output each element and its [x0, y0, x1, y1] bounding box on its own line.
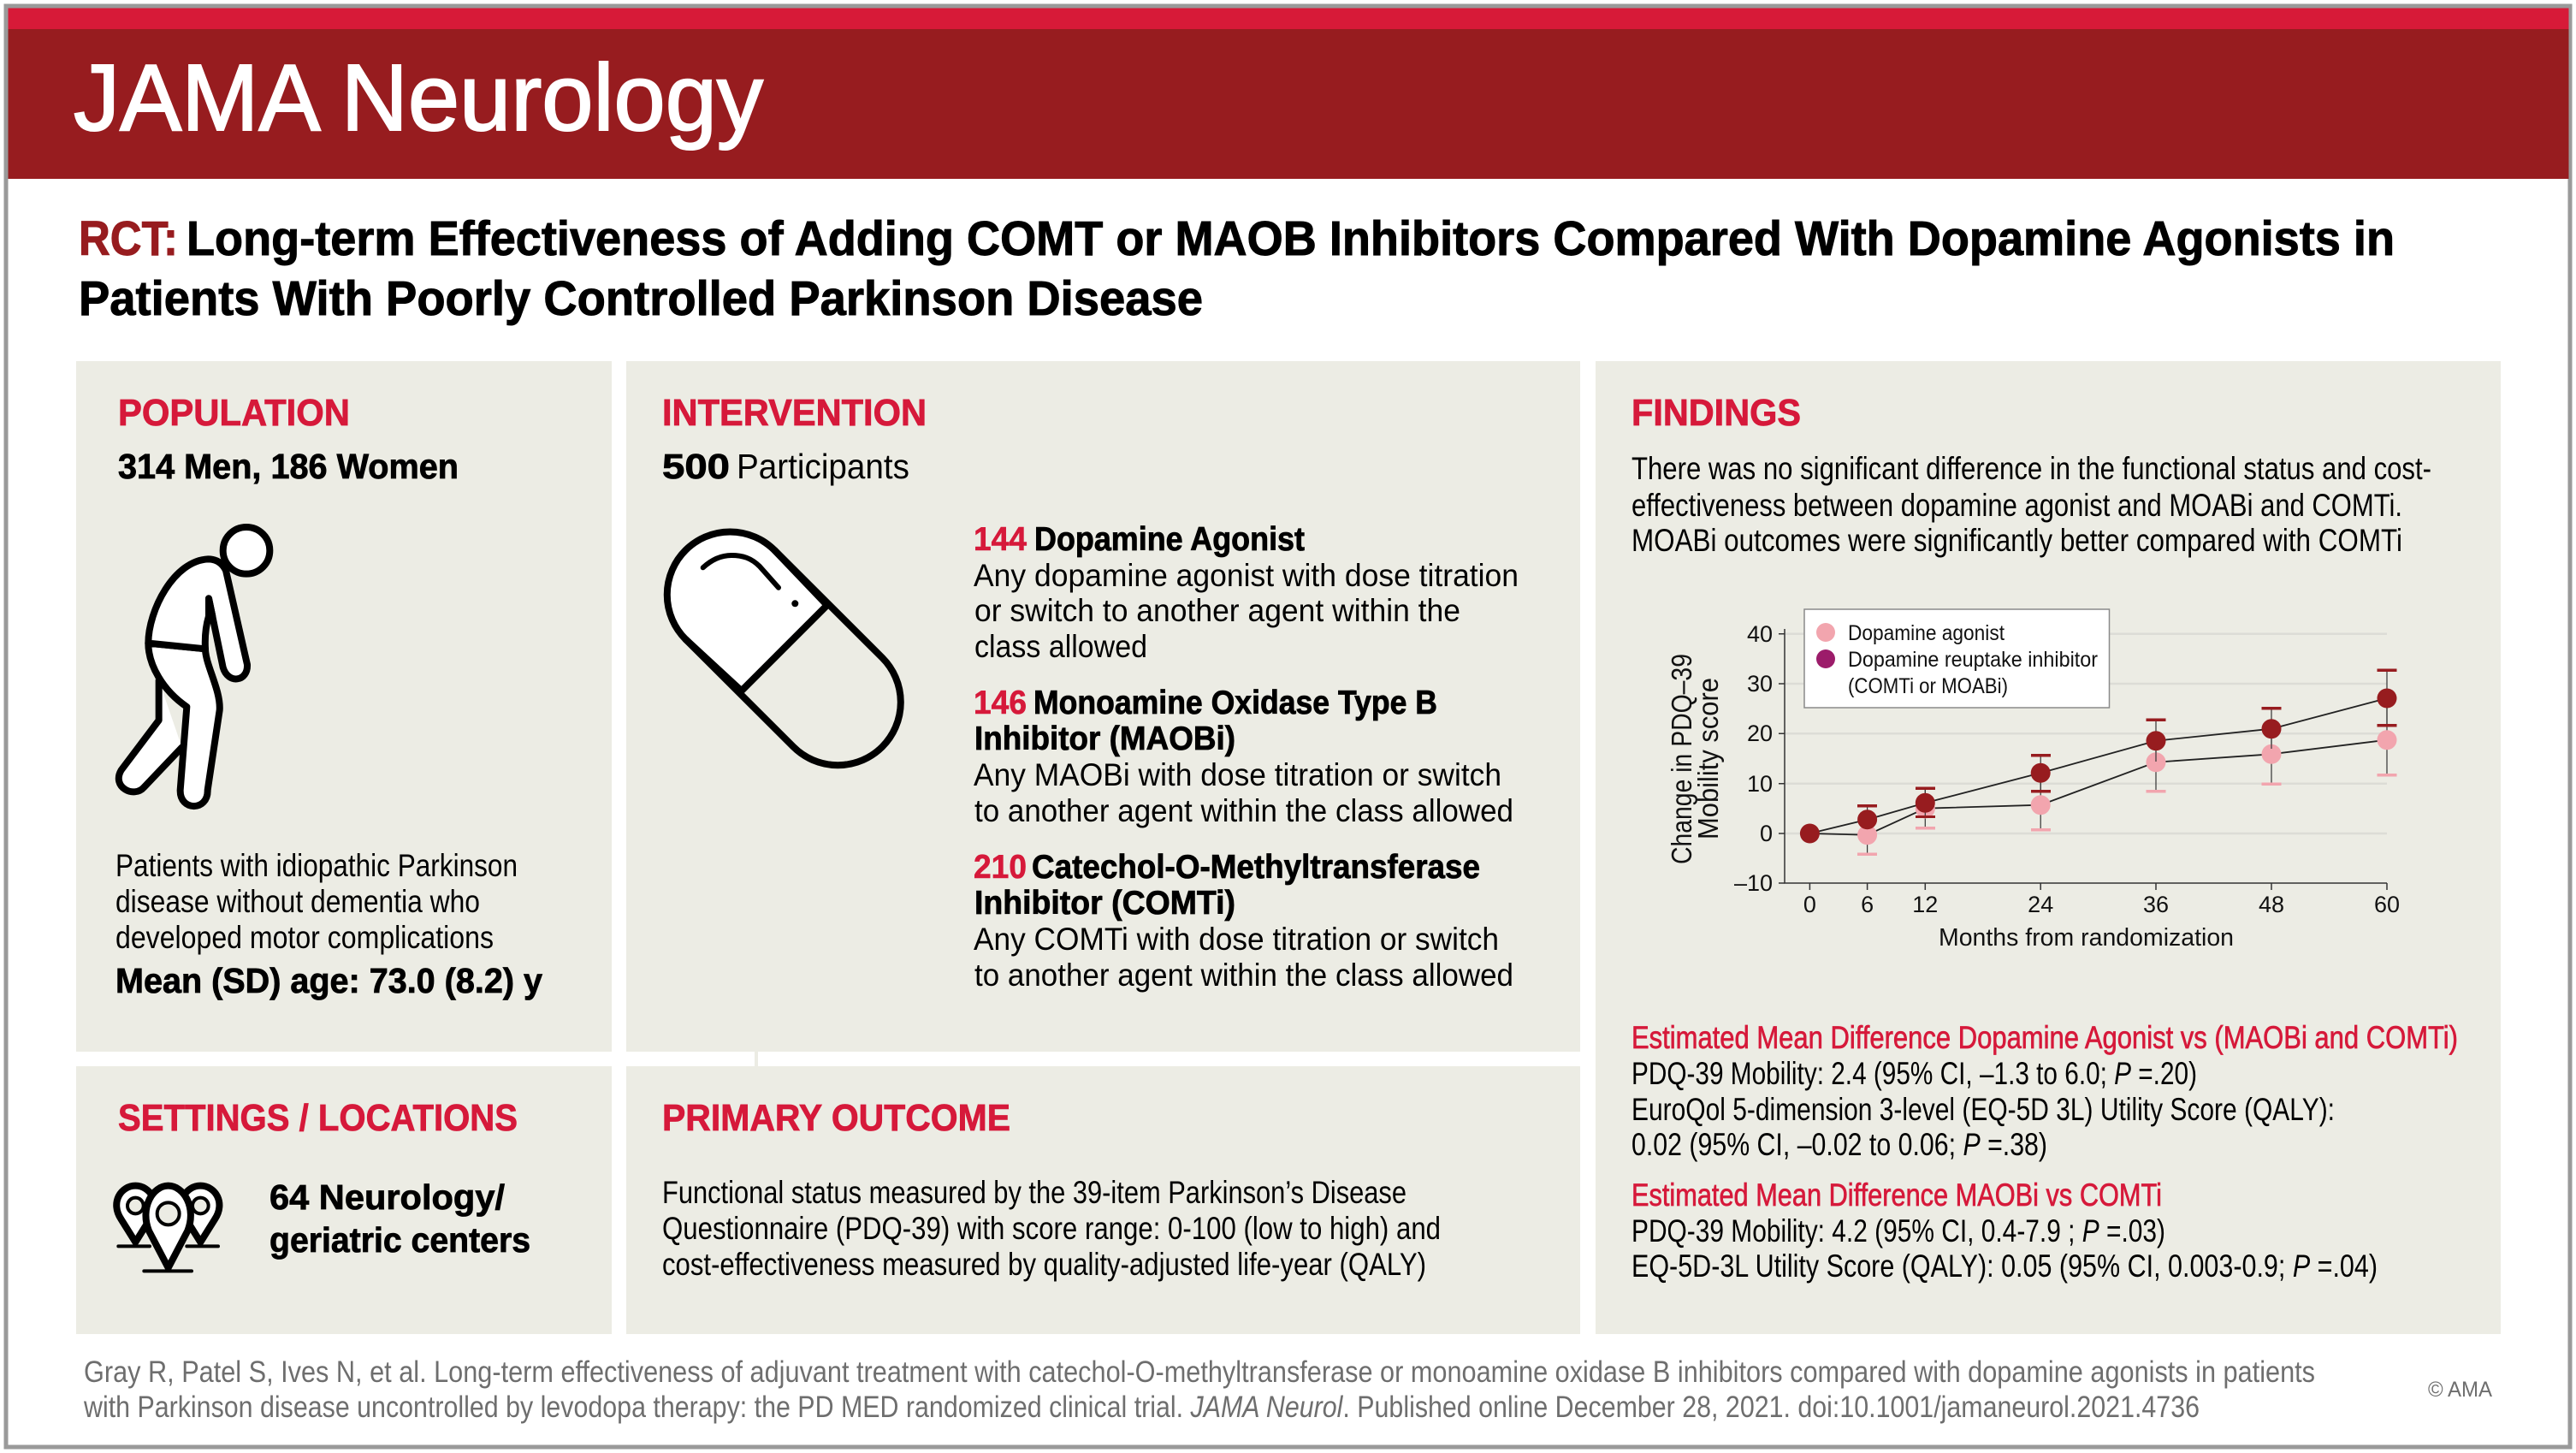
chart legend: (COMTi or MOABi) [1848, 674, 2008, 698]
y axis title [1666, 654, 1724, 864]
estimate: dopamine agonist vs MAOBi and COMTi: EuroQol 5-dimension 3-level (EQ-5D 3L) Utility Score (QALY): [1631, 1092, 2335, 1127]
icon: capsule [667, 531, 901, 765]
x axis labels: 6 [1861, 892, 1874, 917]
participants total: 500 [662, 447, 730, 486]
participants by sex: 314 Men, 186 Women [118, 447, 459, 486]
y axis labels: 0 [1760, 821, 1773, 846]
main title: Patients With Poorly Controlled Parkinson Disease [79, 271, 1203, 326]
participants total: Participants [737, 447, 909, 486]
arm: COMTi: 210 [974, 849, 1027, 886]
sites count [269, 1177, 530, 1260]
copyright: © AMA [2428, 1378, 2492, 1402]
y axis labels [1734, 621, 1773, 896]
arm: MAOBi: to another agent within the class allowed [974, 793, 1513, 828]
citation: Gray R, Patel S, Ives N, et al. Long-term effectiveness of adjuvant treatment with catechol-O-methyltransferase or monoamine oxidase B inhibitors compared with dopamine agonists in patients [84, 1355, 2315, 1389]
mean age: Mean (SD) age: 73.0 (8.2) y [115, 961, 542, 1000]
x axis labels: 48 [2259, 892, 2284, 917]
outcome description: Questionnaire (PDQ-39) with score range: 0-100 (low to high) and [662, 1211, 1441, 1246]
estimate: dopamine agonist vs MAOBi and COMTi [1631, 1020, 2458, 1162]
panel: findings [1596, 361, 2501, 1334]
y axis labels: 10 [1747, 771, 1773, 797]
estimate: MAOBi vs COMTi: Estimated Mean Difference MAOBi vs COMTi [1631, 1177, 2162, 1213]
participants total [662, 447, 909, 486]
estimate: dopamine agonist vs MAOBi and COMTi: PDQ-39 Mobility: 2.4 (95% CI, –1.3 to 6.0; P =.20) [1631, 1056, 2197, 1091]
outcome description [662, 1175, 1441, 1282]
y axis labels: –10 [1734, 870, 1773, 896]
arm: MAOBi: Any MAOBi with dose titration or switch [974, 757, 1501, 792]
arm: dopamine agonist: class allowed [974, 629, 1147, 664]
heading: primary outcome: PRIMARY OUTCOME [662, 1097, 1010, 1139]
series: dopamine agonist [1809, 704, 2397, 856]
outcome description: Functional status measured by the 39-item Parkinson’s Disease [662, 1175, 1406, 1210]
y axis labels: 30 [1747, 671, 1773, 697]
panel: intervention [626, 361, 1580, 1066]
citation [83, 1355, 2315, 1424]
arm: MAOBi: Inhibitor (MAOBi) [974, 721, 1235, 757]
estimate: MAOBi vs COMTi: PDQ-39 Mobility: 4.2 (95% CI, 0.4-7.9 ; P =.03) [1631, 1213, 2165, 1248]
main title [79, 211, 2395, 326]
x axis labels: 60 [2374, 892, 2400, 917]
x axis labels: 12 [1912, 892, 1938, 917]
panel: settings and locations [76, 1066, 612, 1334]
arm: MAOBi: Monoamine Oxidase Type B [1033, 685, 1437, 721]
population description [115, 848, 518, 955]
y axis labels: 20 [1747, 721, 1773, 746]
sites count: 64 Neurology/ [269, 1177, 505, 1217]
arm: COMTi: Catechol-O-Methyltransferase [1032, 849, 1480, 886]
chart legend [1804, 609, 2110, 708]
arm: MAOBi: 146 [974, 685, 1027, 721]
chart legend: Dopamine agonist [1848, 621, 2005, 645]
header banner [9, 9, 2568, 179]
findings summary [1631, 451, 2431, 558]
estimate: dopamine agonist vs MAOBi and COMTi: 0.02 (95% CI, –0.02 to 0.06; P =.38) [1631, 1127, 2047, 1162]
citation: with Parkinson disease uncontrolled by levodopa therapy: the PD MED randomized clinical trial. JAMA Neurol. Published online December 28, 2021. doi:10.1001/jamaneurol.2021.4736 [83, 1391, 2200, 1424]
findings summary: MOABi outcomes were significantly better compared with COMTi [1631, 523, 2402, 558]
x axis labels: 24 [2028, 892, 2053, 917]
main title: RCT: [79, 211, 178, 266]
y axis title: Mobility score [1692, 678, 1724, 839]
arm: dopamine agonist: or switch to another agent within the [974, 593, 1460, 628]
sites count: geriatric centers [269, 1220, 530, 1260]
arm: dopamine agonist: Dopamine Agonist [1034, 521, 1305, 558]
arm: COMTi: Any COMTi with dose titration or switch [974, 922, 1499, 957]
arm: dopamine agonist: Any dopamine agonist with dose titration [974, 558, 1519, 593]
population description: Patients with idiopathic Parkinson [115, 848, 518, 883]
heading: population: POPULATION [118, 392, 350, 434]
arm: COMTi: Inhibitor (COMTi) [974, 885, 1235, 922]
estimate: MAOBi vs COMTi: EQ-5D-3L Utility Score (QALY): 0.05 (95% CI, 0.003-0.9; P =.04) [1631, 1248, 2378, 1284]
arm: COMTi: to another agent within the class allowed [974, 958, 1513, 993]
x axis title: Months from randomization [1939, 924, 2234, 952]
arm: dopamine agonist [974, 521, 1519, 664]
series: dopamine reuptake inhibitor [1800, 669, 2397, 844]
x axis labels: 36 [2143, 892, 2169, 917]
y axis title: Change in PDQ–39 [1666, 654, 1697, 864]
icon: map pins [116, 1186, 219, 1271]
population description: disease without dementia who [115, 884, 480, 919]
panel: primary outcome [626, 1066, 1580, 1334]
icon: stooped person [119, 527, 269, 806]
arm: COMTi [974, 849, 1513, 993]
x axis labels: 0 [1803, 892, 1816, 917]
heading: intervention: INTERVENTION [662, 392, 927, 434]
panel: population [76, 361, 612, 1052]
x axis labels [1803, 892, 2400, 917]
estimate: MAOBi vs COMTi [1631, 1177, 2378, 1284]
findings summary: There was no significant difference in the functional status and cost- [1631, 451, 2431, 486]
arm: MAOBi [974, 685, 1513, 828]
journal title: JAMA Neurology [74, 45, 763, 151]
main title: Long-term Effectiveness of Adding COMT or MAOB Inhibitors Compared With Dopamine Agonists in [187, 211, 2395, 266]
arm: dopamine agonist: 144 [974, 521, 1027, 558]
heading: findings: FINDINGS [1631, 392, 1801, 434]
outcome description: cost-effectiveness measured by quality-adjusted life-year (QALY) [662, 1247, 1426, 1282]
chart legend: Dopamine reuptake inhibitor [1848, 648, 2098, 672]
findings summary: effectiveness between dopamine agonist and MOABi and COMTi. [1631, 488, 2402, 523]
population description: developed motor complications [115, 920, 494, 955]
y axis labels: 40 [1747, 621, 1773, 647]
line chart: change in PDQ-39 mobility score [1666, 609, 2400, 952]
heading: settings: SETTINGS / LOCATIONS [118, 1097, 518, 1139]
